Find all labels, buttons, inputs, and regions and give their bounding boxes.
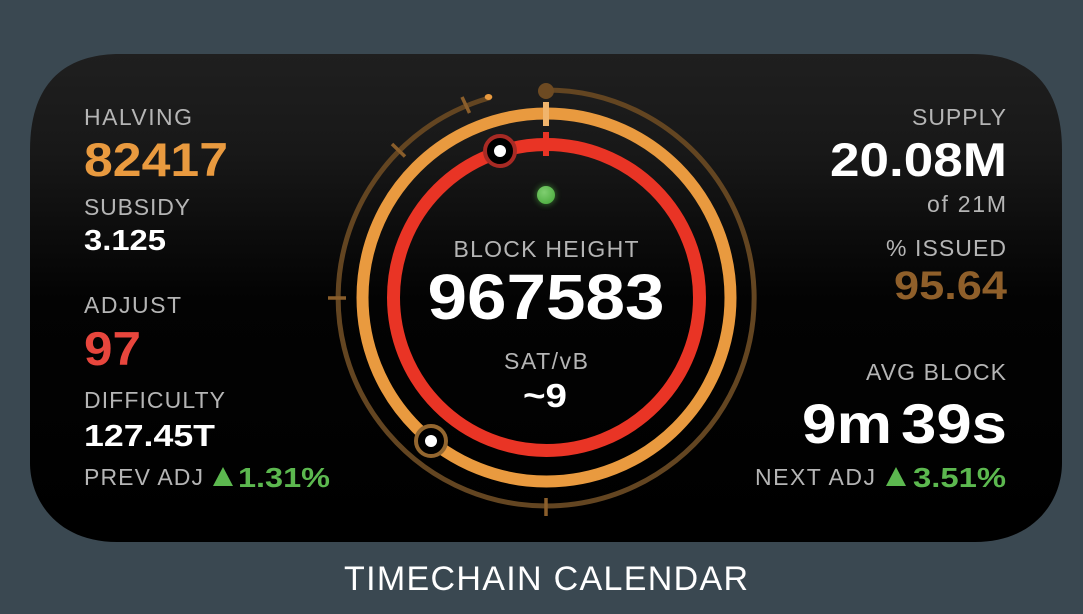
value: difficulty: 127.45T	[84, 418, 215, 453]
arc start knob	[538, 83, 554, 99]
widget card	[30, 54, 1062, 542]
value: supply: 20.08M	[830, 133, 1007, 186]
arc end dot	[485, 94, 492, 100]
dial	[328, 83, 754, 516]
outer arc ticks	[328, 97, 546, 516]
orange ring	[362, 114, 730, 482]
icon: up triangle	[213, 467, 233, 486]
label: percent issued: % ISSUED	[886, 235, 1006, 261]
value: next adjustment: 3.51%	[913, 462, 1006, 493]
value: block height: 967583	[428, 261, 664, 333]
center readout	[428, 236, 664, 414]
label: next adjustment: NEXT ADJ	[755, 464, 875, 490]
right column stats	[755, 104, 1008, 493]
red ring	[394, 144, 700, 450]
red ring top tick	[543, 132, 549, 156]
icon: up triangle	[886, 467, 906, 486]
label: sat per vbyte: SAT/vB	[504, 348, 588, 374]
text: of 21M: of 21M	[927, 191, 1006, 217]
value: percent issued: 95.64	[894, 264, 1008, 308]
label: previous adjustment: PREV ADJ	[84, 464, 203, 490]
label: halving: HALVING	[84, 104, 192, 130]
orange ring top tick	[543, 102, 549, 126]
value: previous adjustment: 1.31%	[238, 462, 330, 493]
label: adjust: ADJUST	[84, 292, 181, 318]
label: difficulty: DIFFICULTY	[84, 387, 225, 413]
value: sat per vbyte: ~9	[523, 377, 567, 414]
outer brown progress arc	[338, 90, 754, 506]
green status dot	[536, 185, 556, 205]
value: average block: 39s	[901, 392, 1007, 455]
value: average block: 9m	[802, 392, 892, 455]
value: adjust: 97	[84, 322, 141, 375]
red ring knob	[485, 136, 515, 166]
label: block height: BLOCK HEIGHT	[454, 236, 638, 262]
orange ring knob	[416, 426, 446, 456]
label: supply: SUPPLY	[912, 104, 1006, 130]
label: average block: AVG BLOCK	[866, 359, 1007, 385]
label: subsidy: SUBSIDY	[84, 194, 190, 220]
caption: TIMECHAIN CALENDAR	[344, 560, 748, 598]
left column stats	[84, 104, 330, 493]
value: halving: 82417	[84, 133, 228, 186]
value: average block	[802, 392, 1007, 455]
value: subsidy: 3.125	[84, 225, 166, 257]
